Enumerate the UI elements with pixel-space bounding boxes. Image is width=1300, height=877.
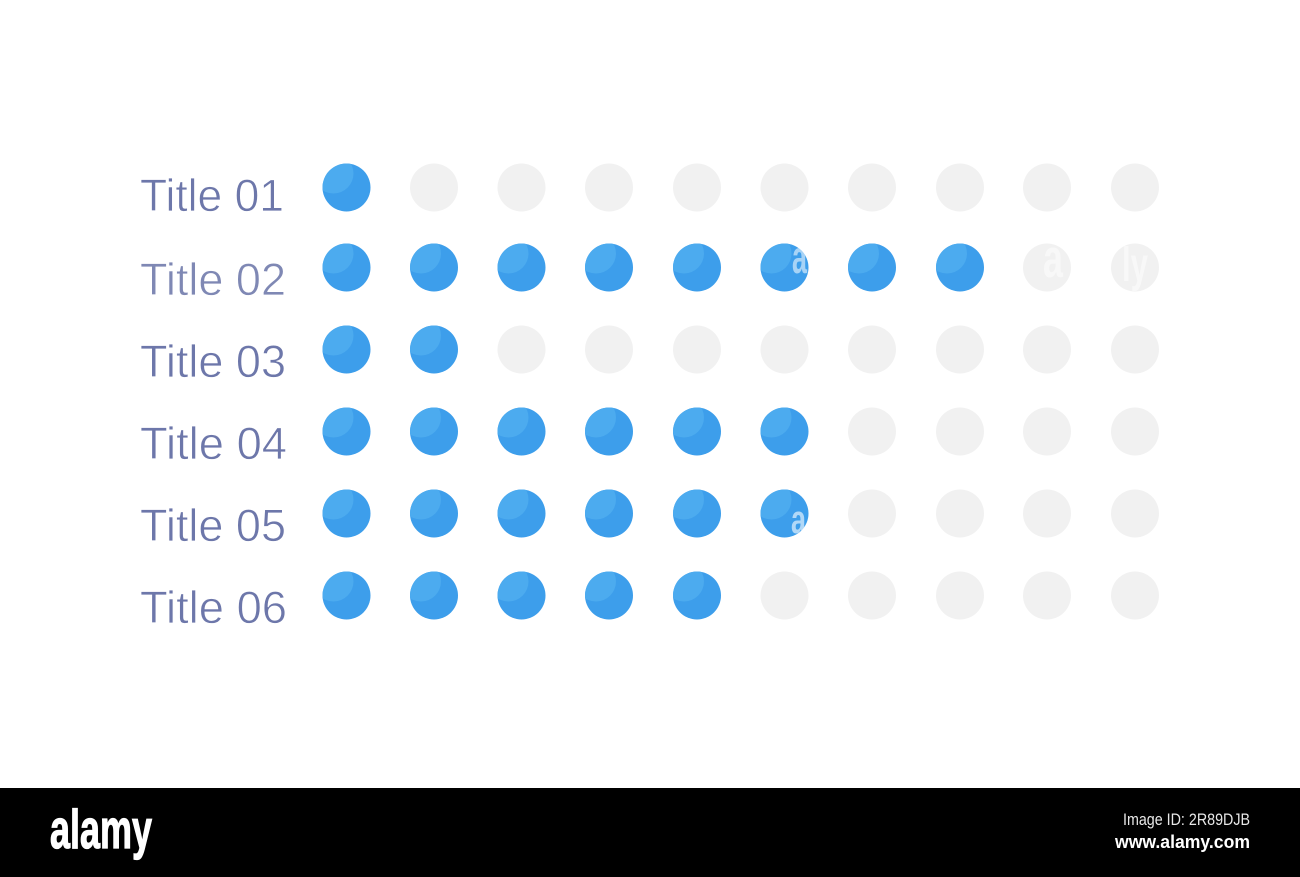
dots: 1 of 10: [314, 154, 1159, 212]
dots: 6 of 10: a: [791, 498, 807, 542]
label: Title 05: Title 05: [140, 500, 286, 551]
label: Title 06: Title 06: [140, 582, 287, 633]
website: www.alamy.com: [1114, 832, 1250, 852]
dots: 6 of 10: [322, 490, 1159, 538]
label: Title 02: Title 02: [140, 254, 286, 305]
dots: 2 of 10: [314, 316, 1159, 374]
row 2: Title 02: [141, 244, 1159, 296]
image id: Image ID: 2R89DJB: [1123, 810, 1250, 829]
dots: 8 of 10: ly: [1122, 239, 1148, 292]
dots: 5 of 10: [314, 562, 1159, 620]
dots: 8 of 10: a: [792, 231, 807, 283]
row 1: Title 01: [140, 154, 1159, 221]
logo: alamy: alamy: [50, 798, 152, 860]
row 4: Title 04: [140, 398, 1159, 469]
row 6: Title 06: [140, 562, 1159, 633]
label: Title 04: Title 04: [140, 418, 287, 469]
dots: 8 of 10: a: [1043, 227, 1063, 289]
dots: 6 of 10: [314, 398, 1159, 456]
row 3: Title 03: [140, 316, 1159, 387]
dots: 8 of 10: [322, 244, 1159, 292]
footer bar: [0, 788, 1300, 877]
label: Title 03: Title 03: [140, 336, 286, 387]
label: Title 01: Title 01: [140, 170, 284, 221]
row 5: Title 05: [141, 490, 1159, 542]
